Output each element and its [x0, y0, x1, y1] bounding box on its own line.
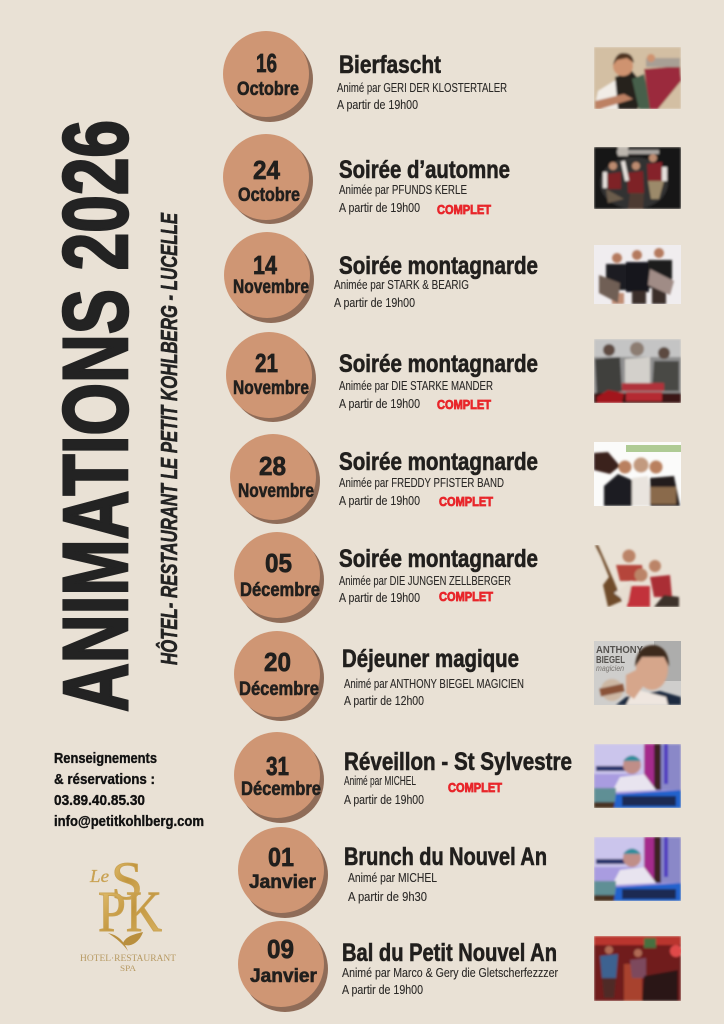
event text	[342, 939, 558, 997]
event text: A partir de 19h00	[339, 494, 420, 508]
date badge 01 Janvier	[238, 827, 328, 918]
date badge 05 Décembre: Décembre	[240, 580, 320, 601]
subtitle: HÔTEL- RESTAURANT LE PETIT KOHLBERG - LUCELLE	[155, 213, 182, 665]
photo: band on red-lit stage	[594, 936, 681, 1001]
contact block	[54, 751, 204, 830]
date badge 21 Novembre: Novembre	[233, 378, 309, 399]
event 1: Bierfascht	[223, 31, 681, 122]
event text	[334, 252, 538, 310]
date badge 24 Octobre: 24	[253, 155, 281, 185]
event 10: Bal du Petit Nouvel An	[238, 921, 682, 1012]
date badge 20 Décembre: 20	[264, 647, 291, 677]
event text: A partir de 19h00	[344, 793, 424, 807]
photo: accordion player	[594, 47, 681, 109]
event text: Brunch du Nouvel An	[344, 843, 547, 871]
event text: Animé par ANTHONY BIEGEL MAGICIEN	[344, 677, 524, 691]
photo: Anthony Biegel magician: magicien	[596, 664, 624, 673]
date badge 09 Janvier: 09	[267, 934, 294, 964]
logo: Le	[89, 866, 109, 886]
photo: band in black and white with red logo	[594, 339, 681, 403]
date badge 16 Octobre: 16	[256, 48, 277, 78]
date badge 14 Novembre: Novembre	[233, 277, 309, 298]
date badge 31 Décembre: Décembre	[241, 779, 321, 800]
photo: Anthony Biegel magician: BIEGEL	[596, 655, 625, 666]
date badge 01 Janvier: 01	[268, 842, 294, 872]
date badge 16 Octobre	[223, 31, 313, 122]
photo: Freddy Pfister band	[594, 442, 681, 506]
event text	[342, 645, 524, 708]
event 7: Déjeuner magique	[234, 631, 681, 721]
event text: A partir de 19h00	[339, 397, 420, 411]
event text: Soirée d’automne	[339, 156, 510, 184]
event 2: Soirée d'automne	[223, 134, 681, 224]
event text: COMPLET	[437, 203, 491, 217]
event 5: Soirée montagnarde Freddy Pfister Band	[230, 434, 681, 524]
logo: HOTEL·RESTAURANT	[80, 954, 176, 964]
event text: Soirée montagnarde	[339, 545, 538, 573]
photo: three musicians jumping	[594, 147, 681, 209]
event text	[344, 843, 547, 904]
event text: COMPLET	[439, 590, 493, 604]
event text: Animée par DIE JUNGEN ZELLBERGER	[339, 574, 511, 588]
event text: A partir de 9h30	[348, 890, 427, 904]
date badge 21 Novembre: 21	[255, 348, 278, 378]
event text: A partir de 19h00	[339, 591, 420, 605]
event text: Animé par Marco & Gery die Gletscherfezzzer	[342, 966, 558, 980]
date badge 28 Novembre: Novembre	[238, 481, 314, 502]
date badge 31 Décembre	[234, 732, 324, 823]
contact block: & réservations :	[54, 772, 155, 788]
event text: Animée par DIE STARKE MANDER	[339, 379, 493, 393]
logo: S	[111, 851, 143, 911]
contact block: info@petitkohlberg.com	[54, 814, 204, 830]
event text	[339, 448, 538, 509]
event text: Animée par PFUNDS KERLE	[339, 183, 467, 197]
date badge 28 Novembre: 28	[259, 451, 286, 481]
date badge 05 Décembre	[234, 532, 324, 623]
event text: COMPLET	[439, 495, 493, 509]
date badge 05 Décembre: 05	[265, 548, 292, 578]
contact block: Renseignements	[54, 751, 157, 767]
logo	[80, 851, 176, 973]
event text	[344, 748, 572, 807]
event text: Animée par FREDDY PFISTER BAND	[339, 476, 504, 490]
event text	[339, 350, 538, 412]
date badge 28 Novembre	[230, 434, 320, 524]
photo: singer Michel	[594, 744, 681, 808]
date badge 14 Novembre: 14	[253, 250, 277, 280]
event text: Soirée montagnarde	[339, 448, 538, 476]
event text: COMPLET	[437, 398, 491, 412]
event text: COMPLET	[448, 781, 502, 795]
date badge 21 Novembre	[226, 332, 316, 422]
event text	[337, 51, 507, 112]
event text: A partir de 19h00	[337, 98, 418, 112]
date badge 20 Décembre	[234, 631, 324, 721]
logo: SPA	[120, 963, 137, 973]
event text: A partir de 12h00	[344, 694, 424, 708]
event text: Animé par MICHEL	[348, 871, 437, 885]
event text: Soirée montagnarde	[339, 252, 538, 280]
event text: Animée par STARK & BEARIG	[334, 278, 469, 292]
event 8: Réveillon St Sylvestre	[234, 732, 681, 823]
event text: Réveillon - St Sylvestre	[344, 748, 572, 776]
event text: Animé par GERI DER KLOSTERTALER	[337, 81, 507, 95]
photo: Anthony Biegel magician	[594, 641, 681, 705]
event 9: Brunch du Nouvel An	[238, 827, 681, 918]
event text: Bierfascht	[339, 51, 442, 79]
event 6: Soirée montagnarde Die Jungen Zellberger	[234, 532, 679, 623]
event text: A partir de 19h00	[334, 296, 415, 310]
date badge 31 Décembre: 31	[266, 751, 289, 781]
date badge 01 Janvier: Janvier	[249, 872, 317, 893]
date badge 20 Décembre: Décembre	[239, 679, 319, 700]
event text: Bal du Petit Nouvel An	[342, 939, 557, 967]
event text: A partir de 19h00	[342, 983, 423, 997]
date badge 24 Octobre	[223, 134, 313, 224]
photo: trio with violin	[594, 545, 681, 607]
contact block: 03.89.40.85.30	[54, 793, 145, 809]
event text: Soirée montagnarde	[339, 350, 538, 378]
date badge 09 Janvier: Janvier	[250, 966, 318, 987]
event text	[339, 545, 538, 605]
logo: PK	[98, 879, 162, 944]
event text	[339, 156, 510, 217]
date badge 09 Janvier	[238, 921, 328, 1012]
date badge 16 Octobre: Octobre	[237, 79, 299, 100]
event text: Déjeuner magique	[342, 645, 519, 673]
date badge 14 Novembre	[224, 232, 314, 323]
event text: Animé par MICHEL	[344, 774, 416, 788]
event text: A partir de 19h00	[339, 201, 420, 215]
photo: three accordionists	[594, 245, 681, 304]
event 4: Soirée montagnarde Die Starke Mander	[226, 332, 681, 422]
photo: Anthony Biegel magician: ANTHONY	[596, 645, 643, 656]
date badge 24 Octobre: Octobre	[238, 185, 300, 206]
event 3: Soirée montagnarde Stark & Bearig	[224, 232, 681, 323]
photo: singer Michel	[594, 837, 681, 901]
